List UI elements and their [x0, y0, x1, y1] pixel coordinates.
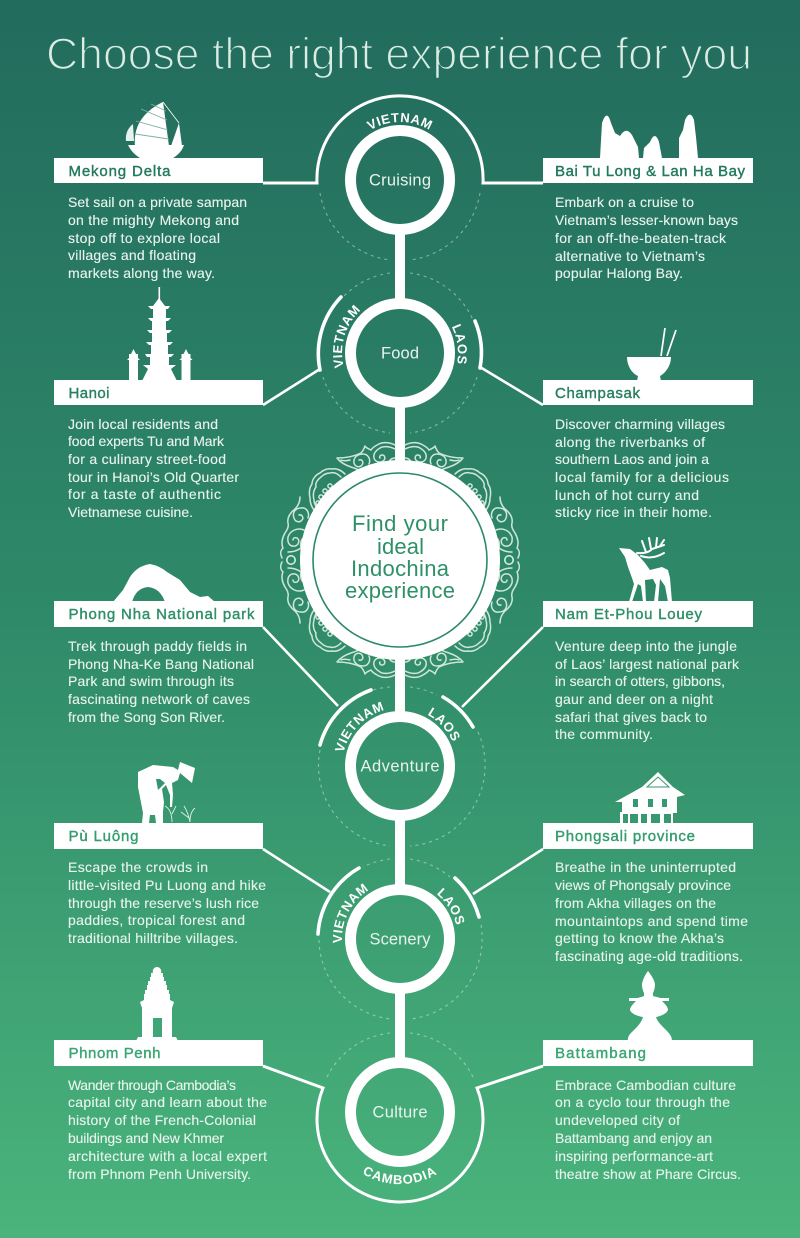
text block: southern Laos and join a — [555, 451, 709, 467]
country arc: Vietnam — [263, 96, 543, 183]
text block: lunch of hot curry and — [555, 487, 699, 503]
panel: Bai Tu Long and Lan Ha Bay — [543, 114, 753, 281]
icon: deer — [619, 538, 672, 602]
central timeline — [318, 193, 485, 1077]
icon: karst islands — [600, 114, 698, 158]
text block: alternative to Vietnam’s — [555, 248, 705, 264]
label bar — [543, 823, 753, 849]
panel: Phongsali province: Phongsali province — [555, 828, 695, 845]
text block: on a cyclo tour through the — [555, 1094, 730, 1110]
text block: Embrace Cambodian culture — [555, 1077, 736, 1093]
centre emblem — [281, 443, 519, 677]
panel: Champasak: Champasak — [555, 385, 640, 402]
icon: rice bowl — [627, 328, 676, 381]
text block: Vietnamese cuisine. — [68, 504, 193, 520]
text block — [555, 638, 740, 742]
text block: in search of otters, gibbons, — [555, 673, 725, 689]
country arc: Cambodia — [263, 1066, 543, 1202]
text block: local family for a delicious — [555, 469, 729, 485]
text block: Set sail on a private sampan — [68, 194, 247, 210]
label bar — [54, 601, 263, 627]
text block: mountaintops and spend time — [555, 913, 748, 929]
node: Culture: Culture — [372, 1104, 428, 1122]
ornament — [281, 443, 519, 677]
text block — [68, 194, 247, 281]
text block: undeveloped city of — [555, 1112, 680, 1128]
icon: rice farmer — [138, 762, 195, 823]
icon: rock arch — [113, 564, 215, 602]
label: Vietnam: VIETNAM — [334, 702, 384, 750]
centre heading: Indochina — [351, 556, 450, 581]
country arc: Vietnam — [318, 868, 359, 934]
panel: Battambang: Battambang — [555, 1045, 646, 1062]
vertical connector — [395, 230, 405, 1062]
text block: of Laos’ largest national park — [555, 656, 740, 672]
dashed guide arcs — [318, 193, 485, 1077]
white disc — [300, 460, 500, 660]
text block: for an off-the-beaten-track — [555, 230, 727, 246]
panel: Battambang — [543, 971, 753, 1182]
country arc: Laos — [475, 321, 481, 368]
icon: Khmer temple — [136, 967, 178, 1041]
text block: from Akha villages on the — [555, 895, 716, 911]
panel: Mekong Delta — [54, 102, 263, 281]
node: Cruising: Cruising — [369, 172, 431, 190]
panel: Phnom Penh — [54, 967, 267, 1182]
connector lines — [263, 367, 543, 405]
text block: sticky rice in their home. — [555, 504, 712, 520]
text block: the community. — [555, 726, 653, 742]
text block: Wander through Cambodia’s — [68, 1077, 236, 1093]
text block: capital city and learn about the — [68, 1094, 267, 1110]
text block — [555, 1077, 741, 1182]
text block: safari that gives back to — [555, 709, 707, 725]
panel: Hanoi: Hanoi — [68, 385, 110, 402]
label bar — [54, 158, 263, 183]
node: Food: Food — [381, 344, 419, 362]
text block: views of Phongsaly province — [555, 877, 731, 893]
text block: Trek through paddy fields in — [68, 638, 247, 654]
node: Cruising — [263, 94, 543, 235]
text block: getting to know the Akha’s — [555, 930, 724, 946]
text block: Join local residents and — [68, 416, 218, 432]
panel: Pu Luong: Pù Luông — [68, 828, 138, 845]
text block — [68, 859, 266, 946]
panel: Phong Nha National park: Phong Nha National park — [68, 606, 255, 623]
text block: history of the French-Colonial — [68, 1112, 256, 1128]
panel: Nam Et-Phou Louey — [543, 538, 753, 742]
text block: along the riverbanks of — [555, 434, 705, 450]
title: Choose the right experience for you — [46, 30, 752, 79]
text block: Breathe in the uninterrupted — [555, 859, 736, 875]
label: Laos: LAOS — [428, 707, 460, 740]
centre heading: ideal — [377, 534, 424, 559]
centre heading — [345, 511, 455, 603]
text block: for a taste of authentic — [68, 486, 221, 502]
country arc: Vietnam — [318, 297, 341, 370]
label bar — [543, 158, 753, 183]
panel: Phnom Penh: Phnom Penh — [68, 1045, 160, 1062]
panel: Phong Nha National park — [54, 564, 263, 725]
centre heading: Find your — [352, 511, 448, 536]
text block: for a culinary street-food — [68, 451, 226, 467]
text block: from Phnom Penh University. — [68, 1166, 251, 1182]
country arc: Laos — [455, 878, 479, 917]
label bar — [543, 601, 753, 627]
text block: Escape the crowds in — [68, 859, 208, 875]
text block: fascinating network of caves — [68, 691, 250, 707]
label: Cambodia: CAMBODIA — [364, 1167, 437, 1184]
label bar — [54, 823, 263, 849]
icon: kneeling dancer — [628, 971, 672, 1041]
label: Laos: LAOS — [437, 888, 464, 924]
text block: tour in Hanoi’s Old Quarter — [68, 469, 239, 485]
text block: little-visited Pu Luong and hike — [68, 877, 266, 893]
icon: junk boat — [126, 102, 184, 158]
panel: Mekong Delta: Mekong Delta — [68, 163, 171, 180]
text block: food experts Tu and Mark — [68, 433, 225, 449]
centre heading: experience — [345, 578, 455, 603]
text block — [68, 1077, 267, 1182]
text block — [555, 416, 729, 520]
text block — [555, 859, 748, 964]
text block: markets along the way. — [68, 265, 215, 281]
text block: Embark on a cruise to — [555, 194, 694, 210]
text block: Park and swim through its — [68, 673, 234, 689]
panel: Nam Et-Phou Louey: Nam Et-Phou Louey — [555, 606, 702, 623]
text block: Venture deep into the jungle — [555, 638, 737, 654]
text block: from the Song Son River. — [68, 709, 225, 725]
label bar — [54, 380, 263, 405]
connector lines — [263, 849, 543, 894]
text block: traditional hilltribe villages. — [68, 930, 238, 946]
text block: Vietnam’s lesser-known bays — [555, 212, 738, 228]
text block: popular Halong Bay. — [555, 265, 683, 281]
node: Adventure — [262, 626, 544, 821]
node: Scenery — [262, 848, 544, 994]
text block: through the reserve’s lush rice — [68, 895, 259, 911]
text block: paddies, tropical forest and — [68, 912, 245, 928]
label: Laos: LAOS — [452, 324, 467, 364]
text block — [555, 194, 738, 281]
label bar — [543, 380, 753, 405]
text block: Discover charming villages — [555, 416, 725, 432]
text block: Battambang and enjoy an — [555, 1130, 712, 1146]
text block: gaur and deer on a night — [555, 691, 713, 707]
connector lines — [263, 627, 543, 707]
label: Vietnam: VIETNAM — [333, 304, 360, 368]
icon detail: windows and gable — [633, 799, 667, 807]
node: Adventure: Adventure — [360, 758, 440, 776]
text block: Phong Nha-Ke Bang National — [68, 656, 254, 672]
label bar — [54, 1040, 263, 1066]
icon: pagoda — [127, 287, 192, 381]
panel: Phongsali province — [543, 772, 753, 964]
text block: villages and floating — [68, 247, 196, 263]
panel: Pu Luong — [54, 762, 266, 946]
text block: on the mighty Mekong and — [68, 212, 239, 228]
label: Vietnam: VIETNAM — [332, 883, 368, 943]
label bar — [543, 1040, 753, 1066]
text block — [68, 638, 254, 725]
text block: fascinating age-old traditions. — [555, 948, 743, 964]
node: Scenery: Scenery — [370, 930, 431, 948]
label: Vietnam: VIETNAM — [366, 112, 432, 130]
text block: buildings and New Khmer — [68, 1130, 224, 1146]
text block — [68, 416, 239, 520]
text block: stop off to explore local — [68, 230, 220, 246]
panel: Champasak — [543, 328, 753, 520]
node: Food — [263, 295, 543, 408]
panel: Hanoi — [54, 287, 263, 520]
text block: theatre show at Phare Circus. — [555, 1166, 741, 1182]
panel: Bai Tu Long and Lan Ha Bay: Bai Tu Long & Lan Ha Bay — [555, 163, 746, 180]
node: Culture — [262, 1057, 544, 1204]
country arc: Vietnam — [320, 690, 371, 745]
icon: stilt house — [615, 772, 685, 824]
text block: architecture with a local expert — [68, 1148, 267, 1164]
text block: inspiring performance-art — [555, 1148, 713, 1164]
country arc: Laos — [443, 697, 473, 727]
